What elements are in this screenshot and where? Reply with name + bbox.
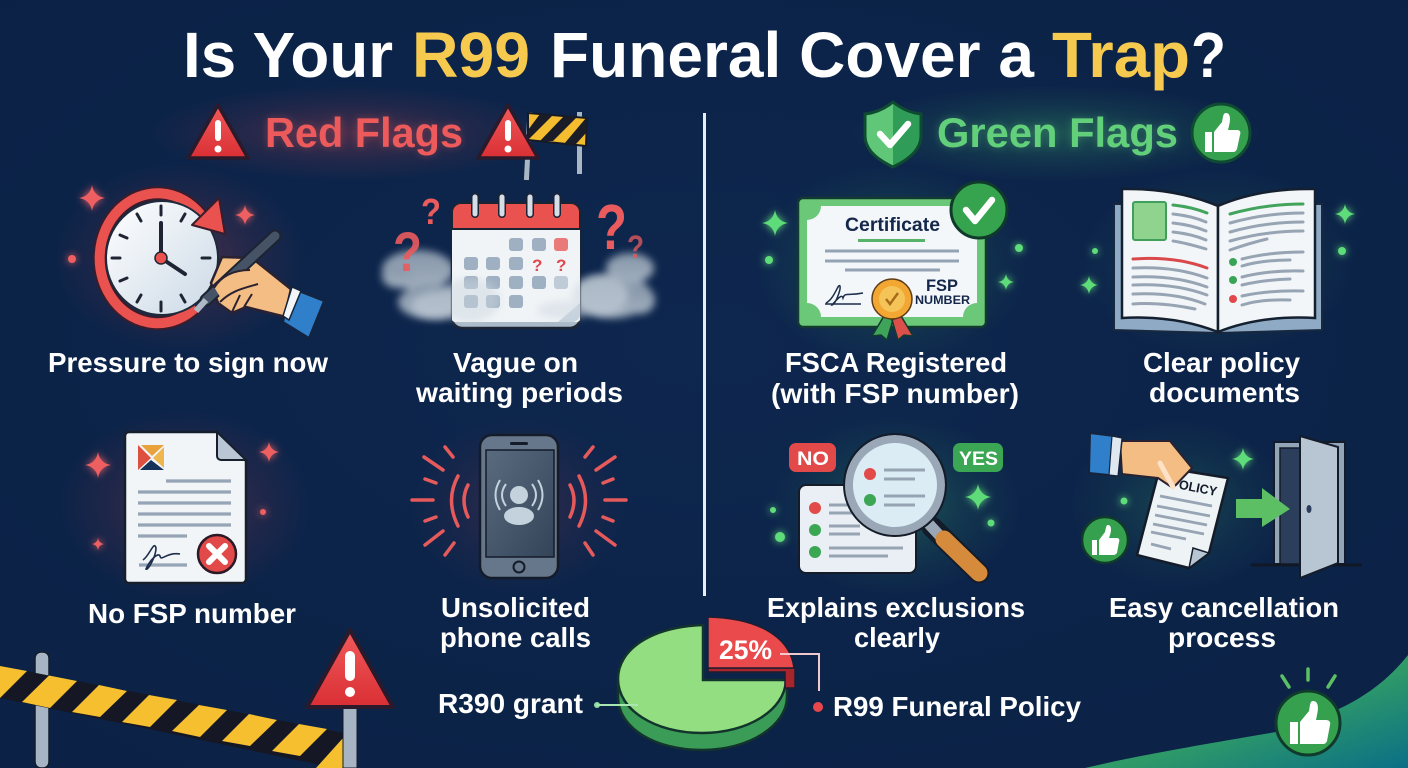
icon: magnifier <box>844 434 979 573</box>
icon: thumbs up <box>1082 517 1128 563</box>
icon: certificate: Certificate <box>845 215 940 236</box>
icon: hand with policy: POLICY <box>1169 475 1219 499</box>
icon: hand with policy <box>1089 433 1228 568</box>
icon: certificate <box>798 182 1007 340</box>
panel: easy cancellation <box>1070 420 1362 653</box>
icon: open book <box>1114 189 1322 333</box>
pie: green side <box>618 681 787 750</box>
title: Trap <box>1052 19 1190 91</box>
label: Unsolicited <box>441 592 590 623</box>
panel: vague on waiting periods <box>382 191 655 408</box>
chart: pie <box>618 617 795 750</box>
sparkles <box>770 484 994 542</box>
icon: warning triangle right <box>478 105 538 158</box>
title: Funeral Cover a <box>550 19 1034 91</box>
icon: question marks: ? <box>421 191 441 232</box>
panel: unsolicited phone calls <box>409 415 629 653</box>
label: process <box>1168 622 1276 653</box>
title: R99 <box>412 19 530 91</box>
label: Clear policy <box>1143 347 1300 378</box>
icon: bottom-right thumbs up <box>1276 669 1340 755</box>
label <box>440 592 591 653</box>
icon: question marks: ? <box>627 229 644 265</box>
icon: arrow <box>1236 488 1290 527</box>
heading text: Red Flags <box>265 109 463 156</box>
callout: R390 grant: R390 grant <box>438 688 583 719</box>
label <box>1143 347 1300 408</box>
barrier: warning sign <box>307 630 393 768</box>
icon: question marks <box>393 191 644 283</box>
icon: calendar <box>452 197 580 328</box>
icon: NO badge <box>789 443 836 472</box>
label: Pressure to sign now <box>48 347 328 378</box>
clock sparkles <box>68 185 255 263</box>
heading text: Green Flags <box>937 109 1178 156</box>
label <box>771 347 1019 409</box>
divider <box>703 113 706 596</box>
icon: clouds in front <box>412 275 628 322</box>
icon: warning triangle left <box>188 105 248 158</box>
label: No FSP number <box>88 598 296 629</box>
label: documents <box>1149 377 1300 408</box>
label: waiting periods <box>415 377 623 408</box>
medal <box>872 279 913 340</box>
panel: pressure to sign now <box>48 163 328 378</box>
cross badge <box>198 535 236 573</box>
label: Vague on <box>453 347 578 378</box>
icon: calendar: ? <box>532 256 542 275</box>
icon: signal rays <box>412 447 626 555</box>
icon: certificate: FSP <box>926 276 958 295</box>
pie: red 25% slice <box>708 617 794 668</box>
callout: R99 funeral policy <box>780 654 1081 722</box>
sparkles <box>1080 204 1355 294</box>
label: Explains exclusions <box>767 592 1025 623</box>
icon: barrier <box>524 112 587 180</box>
panel: explains exclusions <box>767 415 1025 653</box>
title <box>183 19 1226 91</box>
icon: phone <box>480 435 558 578</box>
icon: question marks: ? <box>596 191 627 263</box>
title: Is Your <box>183 19 393 91</box>
label: phone calls <box>440 622 591 653</box>
barrier: bottom-left tape <box>0 652 345 768</box>
label <box>1109 592 1339 653</box>
heading: Red Flags <box>150 85 587 181</box>
icon: signing hand with pen <box>196 236 324 338</box>
heading: Green Flags <box>850 85 1260 181</box>
icon: NO badge: NO <box>797 449 829 470</box>
icon: question marks: ? <box>393 220 422 283</box>
panel: clear policy documents <box>1080 167 1355 408</box>
icon: checklist <box>799 485 916 573</box>
label: clearly <box>854 622 940 653</box>
icon: shield <box>865 102 921 167</box>
icon: clouds behind <box>382 250 655 319</box>
panel: FSCA registered <box>757 165 1027 409</box>
logo <box>138 445 164 470</box>
callout: R99 funeral policy: R99 Funeral Policy <box>833 691 1081 722</box>
pie: green top 75% slice <box>618 625 786 733</box>
icon: YES badge <box>953 443 1003 472</box>
icon: calendar: ? <box>556 256 566 275</box>
sparkles <box>85 442 279 550</box>
label: (with FSP number) <box>771 378 1019 409</box>
panel: no FSP number <box>60 410 310 629</box>
bottom-right green hill <box>1085 655 1408 768</box>
icon: clock <box>100 193 225 323</box>
label <box>415 347 623 408</box>
pie: red slice side <box>708 668 795 688</box>
check badge <box>951 182 1007 238</box>
icon: document <box>125 432 246 583</box>
sparkles <box>762 210 1023 290</box>
icon: certificate: NUMBER <box>915 293 970 307</box>
title: ? <box>1191 19 1226 91</box>
icon: door <box>1251 436 1362 578</box>
icon: thumbs up <box>1192 104 1250 162</box>
pie: 25% label: 25% <box>719 635 772 665</box>
icon: YES badge: YES <box>959 449 998 470</box>
label: FSCA Registered <box>785 347 1007 378</box>
label: Easy cancellation <box>1109 592 1339 623</box>
sparkles <box>1120 448 1254 504</box>
label <box>767 592 1025 653</box>
